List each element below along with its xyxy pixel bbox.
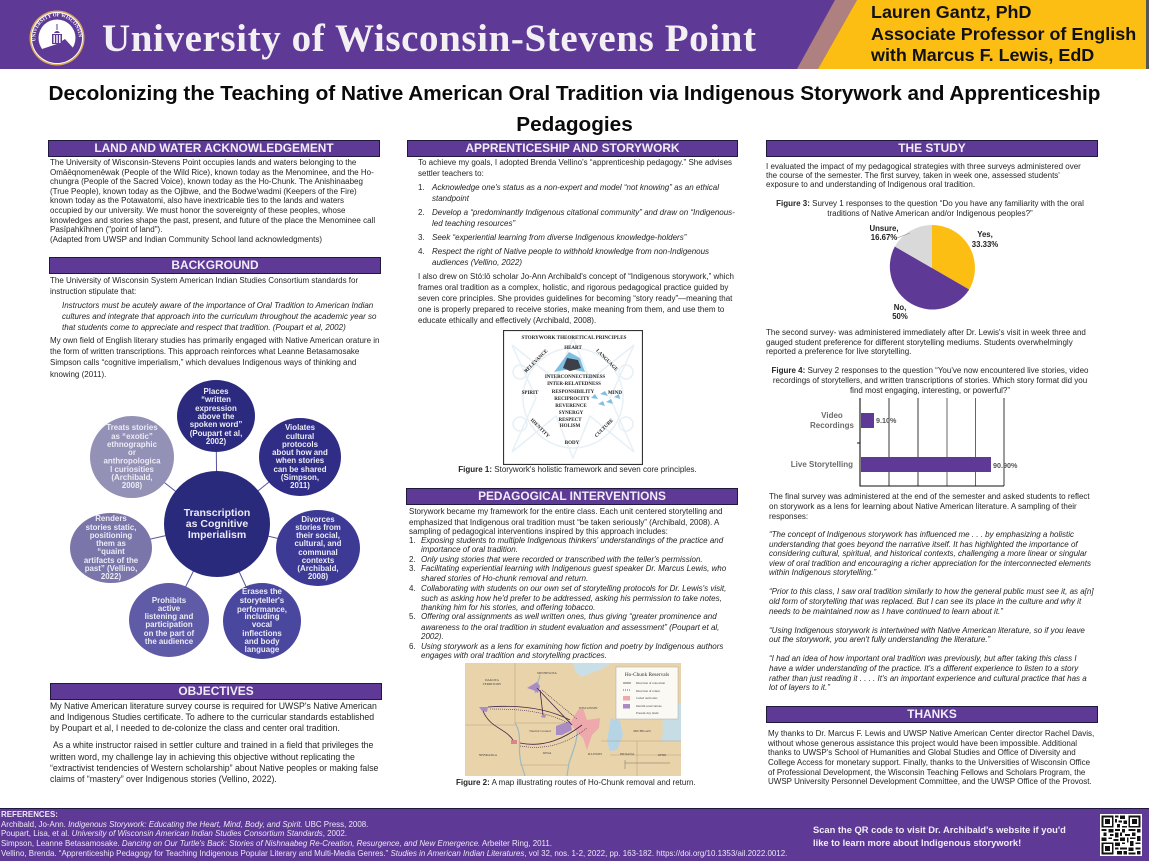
apprenticeship text: 4. bbox=[418, 247, 425, 256]
student quotes: old form of storytelling that was replaced. But I can see its place in the culture and why it bbox=[769, 597, 1081, 606]
final survey text bbox=[769, 492, 1090, 521]
student quotes bbox=[769, 530, 1094, 692]
node: renders stories static: stories static, bbox=[86, 523, 136, 532]
node: renders stories static bbox=[70, 513, 152, 583]
QR prompt: like to learn more about Indigenous storywork! bbox=[813, 838, 1021, 848]
map: MINNESOTA bbox=[537, 671, 557, 675]
student quotes: “Using Indigenous storywork is intertwined with Native American literature, so if you leave bbox=[769, 626, 1085, 635]
storywork framework image: SPIRIT bbox=[522, 391, 539, 396]
map: ILLINOIS bbox=[588, 752, 602, 756]
header banner bbox=[0, 0, 1149, 69]
node: prohibits listening: participation bbox=[145, 620, 193, 629]
node: places written expression: 2002) bbox=[206, 437, 226, 446]
apprenticeship text: standpoint bbox=[432, 194, 469, 203]
node: violates cultural protocols: about how and bbox=[272, 448, 328, 457]
study intro text bbox=[766, 162, 1081, 189]
node: places written expression: spoken word” bbox=[190, 420, 242, 429]
interventions text: importance of oral tradition. bbox=[421, 545, 518, 554]
second survey text bbox=[766, 328, 1086, 356]
objectives text: written word, my challenge lay in achieving this objective without replicating the bbox=[50, 752, 355, 762]
storywork framework image: HOLISM bbox=[560, 424, 581, 429]
node: treats stories as exotic: ethnographic bbox=[107, 440, 158, 449]
background text: Simpson calls “cognitive imperialism,” which devalues Indigenous ways of thinking and bbox=[50, 358, 356, 367]
background text: instruction stipulate that: bbox=[50, 287, 136, 296]
acknowledgement text: (True People), known today as the Ojibwe, and the Bodwe'wadmi (Keepers of the Fire) bbox=[50, 187, 357, 196]
heading: LAND AND WATER ACKNOWLEDGEMENT bbox=[94, 141, 334, 155]
student quotes: needs to be maintained now as I have continued to learn about it.” bbox=[769, 607, 1003, 616]
center node: as Cognitive bbox=[186, 518, 248, 530]
heading bbox=[49, 257, 381, 274]
interventions text: Exposing students to multiple Indigenous thinkers' understandings of the practice and bbox=[421, 536, 723, 545]
interventions text: 4. bbox=[409, 584, 416, 593]
icon: university seal: UNIVERSITY OF WISCONSIN bbox=[32, 13, 82, 42]
heading: PEDAGOGICAL INTERVENTIONS bbox=[478, 489, 666, 503]
node: divorces stories: cultural, and bbox=[295, 539, 342, 548]
node: renders stories static: 2022) bbox=[101, 572, 121, 581]
thanks text bbox=[768, 729, 1094, 786]
map: Neutral Ground bbox=[529, 729, 551, 733]
student quotes: “Prior to this class, I saw oral tradition similarly to how the general public must see it, as a[n] bbox=[769, 587, 1094, 596]
node: prohibits listening bbox=[129, 583, 209, 657]
interventions text: Only using stories that were recorded or transcribed with the teller's permission. bbox=[421, 555, 703, 564]
figure 1: storywork principles bbox=[458, 330, 697, 474]
references: Archibald, Jo-Ann. Indigenous Storywork: Educating the Heart, Mind, Body, and Spirit. UBC Press, 2008. bbox=[1, 820, 368, 829]
map: DAKOTA bbox=[485, 678, 500, 682]
map bbox=[465, 663, 681, 776]
acknowledgement text: chungra (People of the Sacred Voice), known today as the Ho-Chunk. The Anishinaabeg bbox=[50, 177, 363, 186]
references: REFERENCES: bbox=[1, 810, 58, 819]
final survey text: The final survey was administered at the end of the semester and asked students to reflect bbox=[769, 492, 1090, 501]
node: divorces stories: communal bbox=[298, 548, 338, 557]
bar chart: survey 2: 90.90% bbox=[993, 461, 1018, 470]
pie chart: survey 1: Yes, bbox=[977, 230, 993, 239]
node: violates cultural protocols: (Simpson, bbox=[281, 473, 319, 482]
node: places written expression: “written bbox=[201, 395, 231, 404]
storywork framework image: BODY bbox=[565, 441, 580, 446]
apprenticeship text: Develop a “predominantly Indigenous citational community” and draw on “Indigenous- bbox=[432, 208, 735, 217]
storywork framework image: INTERCONNECTEDNESS bbox=[545, 375, 605, 380]
node: divorces stories: Divorces bbox=[301, 515, 335, 524]
storywork framework image: MIND bbox=[608, 391, 622, 396]
node: divorces stories: (Archibald, bbox=[297, 564, 339, 573]
apprenticeship text: educate ethically and effectively (Archibald, 2008). bbox=[418, 316, 596, 325]
apprenticeship text: one is properly prepared to receive stories, make meaning from them, and use them to bbox=[418, 305, 724, 314]
figure 4 caption: recordings of storytellers, and written transcriptions of stories. Which story format did you bbox=[773, 376, 1087, 385]
node: erases performance: vocal bbox=[252, 620, 272, 629]
objectives text: and Indigenous Studies certificate. To adhere to the curricular standards established bbox=[50, 712, 374, 722]
apprenticeship text: Seek “experiential learning from diverse Indigenous knowledge-holders” bbox=[432, 233, 686, 242]
interventions text: Facilitating experiential learning with Indigenous guest speaker Dr. Marcus Lewis, who bbox=[421, 564, 726, 573]
map: INDIANA bbox=[620, 752, 635, 756]
storywork framework image: HEART bbox=[564, 346, 582, 351]
pie chart: survey 1: 33.33% bbox=[972, 240, 998, 249]
interventions text: sampling of pedagogical interventions inspired by this approach includes: bbox=[409, 527, 668, 536]
background text: knowing (2011). bbox=[50, 370, 106, 379]
interventions text bbox=[409, 507, 726, 660]
map: Present-day lands bbox=[636, 711, 659, 715]
second survey text: reported a preference for live storytelling. bbox=[766, 347, 911, 356]
objectives text bbox=[50, 701, 378, 784]
university name: University of Wisconsin-Stevens Point bbox=[102, 17, 757, 60]
node: treats stories as exotic: 2008) bbox=[122, 481, 142, 490]
heading bbox=[48, 140, 380, 157]
map: NEBRASKA bbox=[479, 753, 498, 757]
node: divorces stories: stories from bbox=[295, 523, 341, 532]
storywork framework image: RESPONSIBILITY bbox=[552, 390, 595, 395]
interventions text: emphasized that Indigenous oral tradition must “be taken seriously” (Archibald, 2008). A bbox=[409, 518, 719, 527]
node: violates cultural protocols: can be shared bbox=[273, 465, 327, 474]
references: Simpson, Leanne Betasamosake. Dancing on Our Turtle's Back: Stories of Nishnaabeg Re-Creation, Resurgence, and New Emergence. Arbeiter Ring, 2011. bbox=[1, 839, 552, 848]
node: places written expression: expression bbox=[195, 404, 237, 413]
interventions text: shared stories of Ho-chunk removal and return. bbox=[421, 574, 588, 583]
apprenticeship text: I also drew on Stó:lō scholar Jo-Ann Archibald's concept of “Indigenous storywork,” which bbox=[418, 272, 734, 281]
apprenticeship text: settler teachers to: bbox=[418, 169, 484, 178]
acknowledgement text bbox=[50, 158, 375, 244]
node: treats stories as exotic: Treats stories bbox=[106, 423, 158, 432]
figure 2 caption: Figure 2: A map illustrating routes of Ho-Chunk removal and return. bbox=[456, 778, 696, 787]
node: divorces stories: contexts bbox=[302, 556, 335, 565]
background text: cultures and integrate that approach into the curriculum throughout the academic year so bbox=[62, 312, 376, 321]
node: violates cultural protocols: when stories bbox=[275, 456, 325, 465]
pie chart: survey 1: 50% bbox=[892, 312, 908, 321]
map: MICHIGAN bbox=[633, 729, 651, 733]
node: violates cultural protocols bbox=[259, 418, 341, 496]
second survey text: The second survey- was administered immediately after Dr. Lewis's visit in week three and bbox=[766, 328, 1086, 337]
thanks text: College Access for monetary support. Finally, thanks to the Universities of Wisconsin Office bbox=[768, 758, 1090, 767]
heading bbox=[766, 140, 1098, 157]
interventions text: awareness to the oral tradition in student evaluation and assessment” (Poupart et al, bbox=[421, 623, 719, 632]
apprenticeship text: To achieve my goals, I adopted Brenda Vellino's “apprenticeship pedagogy.” She advises bbox=[418, 158, 732, 167]
node: violates cultural protocols: 2011) bbox=[290, 481, 310, 490]
bar chart: survey 2: Live Storytelling bbox=[791, 460, 853, 469]
student quotes: “I had an idea of how important oral tradition was previously, but after taking this class I bbox=[769, 654, 1077, 663]
interventions text: 5. bbox=[409, 612, 416, 621]
acknowledgement text: known today as the Potawatomi, also have inextricable ties to the lands and waters bbox=[50, 196, 344, 205]
authors: with Marcus F. Lewis, EdD bbox=[871, 45, 1094, 65]
center node: Imperialism bbox=[188, 529, 246, 541]
apprenticeship text: frames oral tradition as a complex, holistic, and rigorous pedagogical practice guided by bbox=[418, 283, 728, 292]
storywork framework image: RECIPROCITY bbox=[554, 397, 590, 402]
map: Direction of return bbox=[636, 689, 660, 693]
figure 1 caption: Figure 1: Storywork's holistic framework and seven core principles. bbox=[458, 465, 697, 474]
authors: Lauren Gantz, PhD bbox=[871, 2, 1031, 22]
study intro text: the course of the semester. The first survey, taken in week one, assessed students' bbox=[766, 171, 1060, 180]
node: erases performance: including bbox=[244, 612, 280, 621]
center node: Transcription bbox=[184, 507, 250, 519]
heading bbox=[406, 488, 738, 505]
pie chart: survey 1: Unsure, bbox=[869, 224, 899, 233]
panel: background bbox=[49, 257, 381, 379]
node: renders stories static: artifacts of the bbox=[84, 556, 139, 565]
map: Interim reservations bbox=[636, 704, 662, 708]
student quotes: rather than just reading it . . . . It's an important experience and cultural practice that has a bbox=[769, 674, 1087, 683]
thanks text: of Professional Development, the Wisconsin Teaching Fellows and Scholars Program, the bbox=[768, 768, 1085, 777]
node: prohibits listening: listening and bbox=[145, 612, 194, 621]
apprenticeship text: led teaching resources” bbox=[432, 219, 515, 228]
figure 4 caption bbox=[772, 366, 1088, 395]
acknowledgement text: The University of Wisconsin-Stevens Point occupies lands and waters belonging to the bbox=[50, 158, 356, 167]
background text: that students come to appreciate and respect that tradition. (Poupart et al, 2002) bbox=[62, 323, 346, 332]
panel: the study bbox=[766, 140, 1098, 521]
thanks text: My thanks to Dr. Marcus F. Lewis and UWSP Native American Center director Rachel Davis, bbox=[768, 729, 1094, 738]
figure 3 caption: traditions of Native American and/or Indigenous peoples?” bbox=[827, 209, 1033, 218]
node: places written expression bbox=[177, 380, 255, 452]
interventions text: Offering oral assignments as well written ones, thus giving “greater prominence and bbox=[421, 612, 717, 621]
poster title: Decolonizing the Teaching of Native American Oral Tradition via Indigenous Storywork and Apprenticeship bbox=[49, 82, 1100, 105]
final survey text: responses: bbox=[769, 512, 808, 521]
header gold and taupe bands bbox=[797, 0, 1149, 69]
bar chart: survey 2: Video bbox=[821, 411, 843, 420]
node: prohibits listening: Prohibits bbox=[152, 596, 187, 605]
node: violates cultural protocols: Violates bbox=[285, 423, 316, 432]
pie chart: survey 1 bbox=[869, 224, 998, 321]
apprenticeship text: Respect the right of Native people to withhold knowledge from non-Indigenous bbox=[432, 247, 709, 256]
node: places written expression: Places bbox=[203, 387, 229, 396]
node: erases performance: performance, bbox=[237, 605, 287, 614]
node: erases performance: inflections bbox=[242, 629, 282, 638]
heading: APPRENTICESHIP AND STORYWORK bbox=[465, 141, 680, 155]
heading bbox=[50, 683, 382, 700]
map: Ceded territories bbox=[636, 696, 658, 700]
heading bbox=[766, 706, 1098, 723]
background text: the form of written transcriptions. This approach reinforces what Leanne Betasamosake bbox=[50, 347, 359, 356]
references: Vellino, Brenda. “Apprenticeship Pedagogy for Teaching Indigenous Popular Literary and Multi-Media Genres.” Studies in American Indian Literatures, vol 32, nos. 1-2, 2022, pp. 163-182. https://doi.org/10.1353/ail.2022.0012. bbox=[1, 849, 787, 858]
QR prompt: Scan the QR code to visit Dr. Archibald's website if you'd bbox=[813, 825, 1066, 835]
node: renders stories static: “quaint bbox=[97, 547, 125, 556]
map: IOWA bbox=[543, 751, 552, 755]
student quotes: understanding that goes beyond the narrative itself. It has highlighted the importance of bbox=[769, 540, 1078, 549]
student quotes: have a wider understanding of the practice. It's a different experience to listen to a story bbox=[769, 664, 1078, 673]
figure 4 caption: find most engaging, interesting, or powerful?” bbox=[850, 386, 1010, 395]
storywork framework image: REVERENCE bbox=[555, 404, 587, 409]
node: erases performance: and body bbox=[244, 637, 280, 646]
storywork framework image: RELEVANCE bbox=[524, 349, 550, 374]
apprenticeship text bbox=[418, 158, 735, 325]
apprenticeship text: audiences (Vellino, 2022) bbox=[432, 258, 522, 267]
references: Poupart, Lisa, et al. University of Wisconsin American Indian Studies Consortium Standards, 2002. bbox=[1, 829, 347, 838]
map: WISCONSIN bbox=[579, 706, 598, 710]
node: renders stories static: past” (Vellino, bbox=[85, 564, 137, 573]
acknowledgement text: (Adapted from UWSP and Indian Community School land acknowledgments) bbox=[50, 235, 322, 244]
QR prompt bbox=[813, 825, 1066, 848]
interventions text: such as asking how he'd prefer to be addressed, asking his permission to take notes, bbox=[421, 594, 722, 603]
pie chart: survey 1: No, bbox=[894, 303, 906, 312]
interventions text: 2. bbox=[409, 555, 416, 564]
study intro text: exposure to and understanding of Indigenous oral tradition. bbox=[766, 180, 975, 189]
objectives text: by Poupart et al, I needed to de-colonize the class and center oral tradition. bbox=[50, 723, 340, 733]
apprenticeship text: seven core principles. She provides guidelines for becoming “story ready”—meaning that bbox=[418, 294, 732, 303]
heading: THANKS bbox=[907, 707, 957, 721]
node: treats stories as exotic: anthropologica bbox=[104, 456, 161, 466]
final survey text: on storywork as a lens for learning about Native American literature. A sampling of their bbox=[769, 502, 1077, 511]
background text bbox=[50, 276, 379, 379]
pie chart: survey 1: 16.67% bbox=[871, 233, 897, 242]
apprenticeship text: 2. bbox=[418, 208, 425, 217]
student quotes: considering cultural, spiritual, and historical contexts, challenging a more linear or singular bbox=[769, 549, 1087, 558]
bar chart: survey 2: Recordings bbox=[810, 421, 855, 430]
center node bbox=[164, 471, 270, 577]
storywork framework image: SYNERGY bbox=[559, 411, 584, 416]
student quotes: lot of layers to it.” bbox=[769, 683, 830, 692]
panel: pedagogical interventions bbox=[406, 488, 738, 660]
student quotes: view of oral tradition and encouraging a richer appreciation for the interconnected elements bbox=[769, 559, 1091, 568]
storywork framework image: INTER-RELATEDNESS bbox=[547, 382, 601, 387]
node: places written expression: above the bbox=[198, 412, 235, 421]
references bbox=[1, 810, 787, 858]
map: OHIO bbox=[658, 753, 667, 757]
icon: QR code bbox=[1100, 814, 1142, 856]
acknowledgement text: Omāēqnomenēwak (People of the Wild Rice), known today as the Menominee, and the Ho- bbox=[50, 168, 374, 177]
objectives text: “extractivist tendencies of Western scholarship” about Native peoples or making false bbox=[50, 763, 378, 773]
interventions text: Using storywork as a lens for examining how fiction and poetry by Indigenous authors bbox=[421, 642, 723, 651]
study intro text: I evaluated the impact of my pedagogical strategies with three surveys administered over bbox=[766, 162, 1081, 171]
thanks text: thanks to UWSP's School of Humanities and Global Studies and Office of Diversity and bbox=[768, 748, 1076, 757]
diagram: transcription as cognitive imperialism bbox=[70, 380, 360, 659]
objectives text: claims of “mastery” over Indigenous stories (Vellino, 2022). bbox=[50, 774, 277, 784]
panel: objectives bbox=[50, 683, 382, 784]
heading: THE STUDY bbox=[898, 141, 966, 155]
storywork framework image: IDENTITY bbox=[529, 418, 550, 439]
interventions text: Storywork became my framework for the entire class. Each unit centered storytelling and bbox=[409, 507, 722, 516]
node: renders stories static: Renders bbox=[95, 514, 127, 523]
node: treats stories as exotic: (Archibald, bbox=[111, 473, 153, 482]
storywork framework image bbox=[503, 330, 643, 465]
node: violates cultural protocols: cultural bbox=[286, 432, 314, 441]
storywork framework image: STORYWORK THEORETICAL PRINCIPLES bbox=[522, 335, 627, 341]
node: prohibits listening: active bbox=[158, 604, 181, 613]
interventions text: thanking him for his stories, and offering tobacco. bbox=[421, 603, 595, 612]
thanks text: UWSP University Personnel Development Committee, and the UWSP Office of the Provost. bbox=[768, 777, 1092, 786]
map: TERRITORY bbox=[483, 682, 502, 686]
node: treats stories as exotic bbox=[90, 416, 174, 498]
objectives text: As a white instructor raised in settler culture and trained in a field that privileges the bbox=[53, 740, 373, 750]
thanks text: without whose generous assistance this project would have been impossible. Additional bbox=[768, 739, 1077, 748]
node: renders stories static: them as bbox=[96, 539, 127, 548]
map: Ho-Chunk Reservals bbox=[625, 672, 669, 678]
node: places written expression: (Poupart et al, bbox=[190, 429, 242, 438]
background text: The University of Wisconsin System American Indian Studies Consortium standards for bbox=[50, 276, 358, 285]
node: renders stories static: positioning bbox=[90, 531, 132, 540]
node: divorces stories: 2008) bbox=[308, 572, 328, 581]
authors bbox=[871, 2, 1136, 65]
panel: apprenticeship and storywork bbox=[407, 140, 738, 325]
node: violates cultural protocols: protocols bbox=[282, 440, 319, 449]
interventions text: 6. bbox=[409, 642, 416, 651]
objectives text: My Native American literature survey course is required for UWSP's Native American bbox=[50, 701, 377, 711]
node: erases performance: language bbox=[245, 645, 280, 654]
node: erases performance: storyteller's bbox=[240, 596, 285, 605]
node: divorces stories: their social, bbox=[296, 531, 340, 540]
background text: My own field of English literary studies has primarily engaged with Native American orature in bbox=[50, 336, 379, 345]
poster title: Pedagogies bbox=[516, 113, 633, 136]
apprenticeship text: Acknowledge one's status as a non-expert and model “not knowing” as an ethical bbox=[432, 183, 719, 192]
node: erases performance bbox=[223, 583, 301, 659]
interventions text: 3. bbox=[409, 564, 416, 573]
apprenticeship text: 1. bbox=[418, 183, 425, 192]
interventions text: 1. bbox=[409, 536, 416, 545]
node: treats stories as exotic: or bbox=[128, 448, 136, 457]
bar chart: survey 2: 9.10% bbox=[876, 416, 897, 425]
storywork framework image: RESPECT bbox=[558, 418, 582, 423]
student quotes: within Indigenous storytelling.” bbox=[769, 568, 876, 577]
interventions text: 2002). bbox=[421, 632, 444, 641]
student quotes: “The concept of Indigenous storywork has influenced me . . . by emphasizing a holistic bbox=[769, 530, 1074, 539]
node: prohibits listening: the audience bbox=[145, 637, 194, 646]
map: Direction of relocation bbox=[636, 681, 665, 685]
figure 3 caption: Figure 3: Survey 1 responses to the question “Do you have any familiarity with the oral bbox=[776, 199, 1084, 208]
bar chart: survey 2 bbox=[791, 398, 1018, 486]
footer band bbox=[0, 808, 1149, 861]
figure 3 caption bbox=[776, 199, 1084, 218]
figure 4 caption: Figure 4: Survey 2 responses to the question “You've now encountered live stories, video bbox=[772, 366, 1088, 375]
panel: land and water acknowledgement bbox=[48, 140, 380, 244]
node: erases performance: Erases the bbox=[242, 587, 283, 596]
acknowledgement text: occupied by our university. We must honor the sovereignty of these peoples, whose bbox=[50, 206, 345, 215]
interventions text: engages with oral tradition and storytelling practices. bbox=[421, 651, 607, 660]
node: treats stories as exotic: as “exotic” bbox=[111, 432, 153, 441]
storywork framework image: LANGUAGE bbox=[594, 349, 619, 373]
heading: BACKGROUND bbox=[171, 258, 259, 272]
node: divorces stories bbox=[276, 510, 360, 586]
acknowledgement text: Pasīpahkīhnen ("point of land"). bbox=[50, 225, 162, 234]
node: prohibits listening: on the part of bbox=[144, 629, 195, 638]
authors: Associate Professor of English bbox=[871, 24, 1136, 44]
second survey text: gauged student preference for different storytelling mediums. Students overwhelmingly bbox=[766, 338, 1073, 347]
panel: thanks bbox=[766, 706, 1098, 786]
heading: OBJECTIVES bbox=[178, 684, 254, 698]
apprenticeship text: 3. bbox=[418, 233, 425, 242]
poster title bbox=[49, 82, 1100, 136]
figure 2: Ho-Chunk removal map bbox=[456, 663, 696, 787]
heading bbox=[407, 140, 738, 157]
student quotes: out the storywork, you aren't fully understanding the literature.” bbox=[769, 635, 990, 644]
node: treats stories as exotic: l curiosities bbox=[110, 465, 155, 474]
background text: Instructors must be acutely aware of the importance of Oral Tradition to American Indian bbox=[62, 301, 373, 310]
acknowledgement text: knowledges and stories shape the past, present, and future of the place the Menominee call bbox=[50, 216, 375, 225]
interventions text: Collaborating with students on our own set of storytelling protocols for Dr. Lewis's visit, bbox=[421, 584, 726, 593]
storywork framework image: CULTURE bbox=[594, 418, 615, 439]
